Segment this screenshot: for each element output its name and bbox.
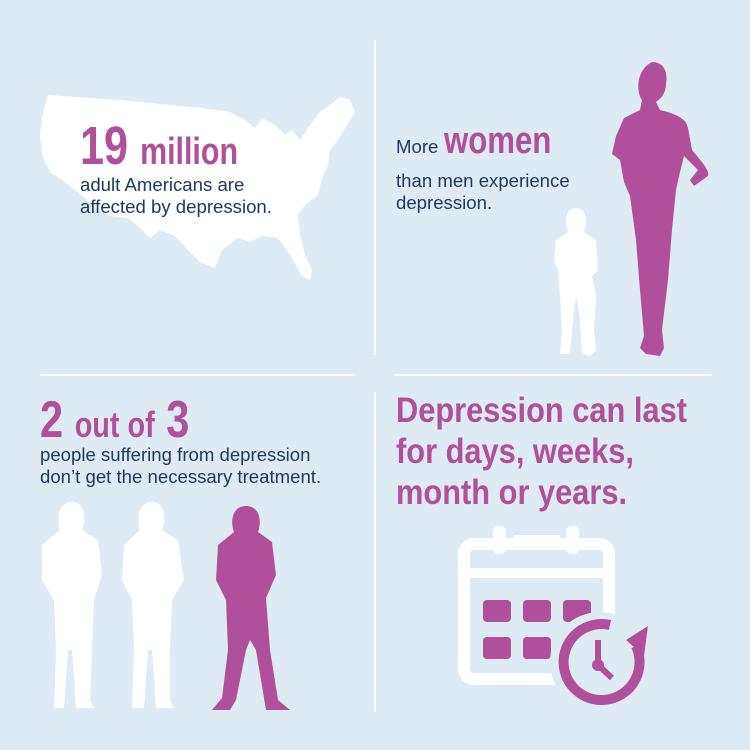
icon: three men bbox=[42, 502, 290, 710]
text: 19 million bbox=[80, 116, 272, 217]
heading: depression can last bbox=[396, 391, 687, 512]
text: 2 out of 3 bbox=[40, 391, 321, 487]
heading: depression can last: month or years. bbox=[396, 473, 627, 512]
heading: depression can last: Depression can last bbox=[396, 391, 687, 430]
text: 2 out of 3: people suffering from depression bbox=[40, 444, 310, 465]
text: 19 million: affected by depression. bbox=[80, 196, 272, 217]
icon: woman silhouette bbox=[612, 62, 708, 356]
text: 2 out of 3: don’t get the necessary treatment. bbox=[40, 466, 321, 487]
text: more women: than men experience bbox=[396, 170, 570, 191]
text: more women: depression. bbox=[396, 192, 492, 213]
heading: depression can last: for days, weeks, bbox=[396, 432, 634, 471]
icon: US map bbox=[40, 95, 355, 280]
text: more women: women bbox=[444, 120, 551, 162]
text: more women bbox=[396, 120, 570, 213]
text: 19 million: 19 million bbox=[80, 116, 238, 176]
text: more women: More bbox=[396, 136, 438, 157]
icon: man silhouette small bbox=[554, 208, 598, 356]
text: 2 out of 3: 2 out of 3 bbox=[40, 391, 189, 449]
text: 19 million: adult Americans are bbox=[80, 174, 244, 195]
icon: calendar with clock bbox=[464, 526, 650, 712]
